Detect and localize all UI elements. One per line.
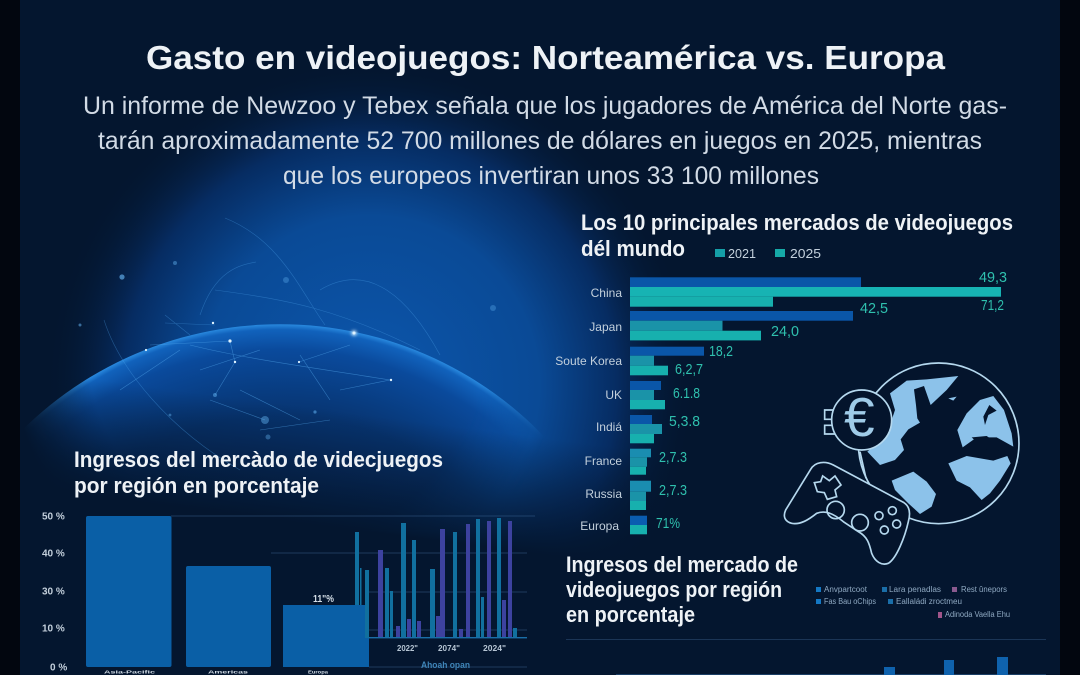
subtitle text: que los europeos invertiran unos 33 100 millones [283, 162, 819, 190]
legend: categories: Anvpartcoot [824, 585, 868, 594]
bars [86, 516, 369, 667]
market: South Korea [555, 343, 733, 378]
y axis labels: 10 % [42, 624, 65, 635]
small chart year labels: 2022" [397, 644, 418, 653]
market: Japan [589, 300, 888, 340]
market: South Korea: 6,2,7 [675, 361, 703, 378]
market: UK: UK [605, 388, 622, 402]
heading: revenue by region, left: Ingresos del mercàdo de videcjuegos [74, 447, 443, 472]
market: Russia: Russia [585, 487, 622, 501]
heading: revenue by region, right: videojuegos por región [566, 577, 782, 602]
icon: globe [858, 363, 1019, 524]
market: China [591, 269, 1007, 314]
market: France [585, 449, 687, 475]
divider [566, 639, 1046, 640]
small chart source: Ahoah opan [421, 660, 470, 670]
icon: euro coin [825, 386, 892, 478]
market: Russia: 2,7.3 [659, 482, 687, 499]
heading: revenue by region, right: en porcentaje [566, 602, 695, 627]
icon: globe, euro coin and game controller [784, 363, 1019, 564]
small chart year labels [397, 644, 506, 653]
category labels [104, 670, 329, 674]
heading: top 10 markets [581, 210, 1013, 261]
heading: revenue by region, right: Ingresos del mercado de [566, 552, 798, 577]
icon: euro coin: € [844, 386, 875, 448]
legend: categories: Rest ûnepors [961, 585, 1007, 594]
market: India: Indiá [596, 420, 622, 434]
legend: years: 2021 [728, 246, 756, 261]
title: Gasto en videojuegos: Norteamérica vs. Europa [146, 39, 946, 76]
heading: revenue by region, left: por región en porcentaje [74, 473, 319, 498]
y axis labels [42, 512, 67, 674]
y axis labels: 40 % [42, 549, 65, 560]
icon: game controller [784, 462, 910, 564]
y axis labels: 30 % [42, 587, 65, 598]
y axis labels: 0 % [50, 663, 67, 674]
market: UK [605, 381, 700, 409]
market: China: 71,2 [981, 297, 1004, 314]
market: India: 5,3.8 [669, 413, 700, 430]
heading: top 10 markets: dél mundo [581, 236, 685, 261]
market: Japan: 24,0 [771, 323, 799, 340]
bar chart: top markets [555, 269, 1007, 534]
subtitle text: tarán aproximadamente 52 700 millones de dólares en juegos en 2025, mientras [98, 127, 982, 155]
market: France: France [585, 454, 622, 468]
small chart year labels: 2074" [438, 644, 460, 653]
category labels: Americas [208, 670, 249, 674]
legend: categories: Fas Bau oChips [824, 597, 876, 606]
market: China: China [591, 286, 622, 300]
bar value: 11"% [313, 594, 334, 605]
market: South Korea: Soute Korea [555, 354, 622, 368]
market: Japan: Japan [589, 320, 622, 334]
market: Europa: 71% [656, 515, 680, 532]
heading: top 10 markets: Los 10 principales mercados de videojuegos [581, 210, 1013, 235]
category labels: Asia-Pacific [104, 670, 156, 674]
legend: years: 2025 [790, 246, 821, 261]
market: Russia [585, 481, 687, 510]
market: Europa: Europa [580, 519, 619, 533]
market: China: 49,3 [979, 269, 1007, 286]
heading: revenue by region, left [74, 447, 443, 498]
legend: categories: Adinoda Vaella Ehu [945, 610, 1010, 619]
market: Japan: 42,5 [860, 300, 888, 317]
market: Europa [580, 515, 680, 534]
market: India [596, 413, 700, 443]
bar chart: bottom right, cropped [616, 657, 1046, 675]
market: South Korea: 18,2 [709, 343, 733, 360]
market: UK: 6.1.8 [673, 385, 700, 402]
market: France: 2,7.3 [659, 449, 687, 466]
small bars time series [355, 518, 527, 638]
small chart year labels: 2024" [483, 644, 506, 653]
legend: years [715, 246, 821, 261]
subtitle text [83, 92, 1007, 190]
legend: categories [816, 585, 1010, 619]
heading: revenue by region, right [566, 552, 798, 627]
illustration: network globe [28, 218, 624, 675]
y axis labels: 50 % [42, 512, 65, 523]
subtitle text: Un informe de Newzoo y Tebex señala que los jugadores de América del Norte gas- [83, 92, 1007, 120]
bar chart: revenue by region [42, 512, 535, 674]
legend: categories: Lara penadlas [889, 585, 941, 594]
legend: categories: Εallaládi zroctmeu [896, 597, 962, 606]
blue glow [40, 60, 695, 675]
category labels: Europa [308, 670, 329, 674]
